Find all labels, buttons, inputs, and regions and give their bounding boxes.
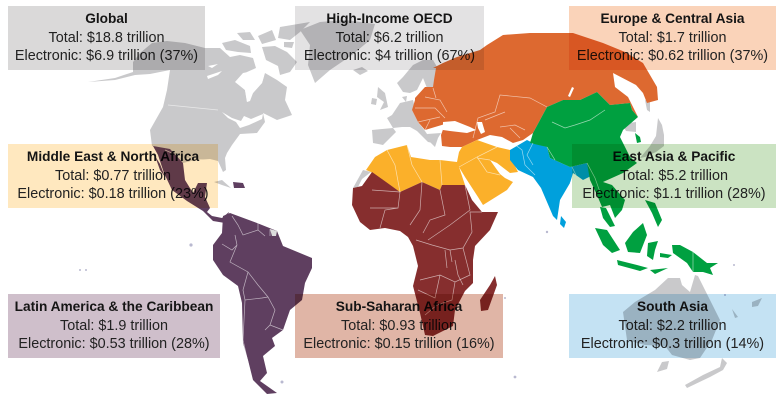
panel: High-Income OECD: Electronic: $4 trillion (67%): [304, 48, 475, 64]
panel: South Asia: [569, 294, 776, 358]
map: small islands: [79, 231, 735, 384]
map: lakes and bays of North America: [207, 64, 264, 128]
panel: East Asia and Pacific: Electronic: $1.1 trillion (28%): [582, 186, 766, 202]
panel: South Asia: Total: $2.2 trillion: [618, 318, 726, 334]
panel: Sub-Saharan Africa: Electronic: $0.15 trillion (16%): [303, 336, 495, 352]
map: high-income OECD and unclassified regions: [88, 20, 762, 388]
panel: Europe and Central Asia: [569, 6, 776, 70]
map: Sub-Saharan Africa: [352, 172, 498, 336]
panel: South Asia: South Asia: [637, 299, 708, 314]
map: Madagascar: [480, 276, 497, 311]
panel: Europe and Central Asia: Europe & Central Asia: [600, 11, 744, 26]
panel: Global: Electronic: $6.9 trillion (37%): [15, 48, 198, 64]
panel: East Asia and Pacific: [572, 144, 776, 208]
panel: Sub-Saharan Africa: Total: $0.93 trillion: [341, 318, 457, 334]
panel: East Asia and Pacific: East Asia & Pacific: [613, 149, 735, 164]
map: Sri Lanka: [560, 216, 566, 228]
panel: South Asia: Electronic: $0.3 trillion (14%): [581, 336, 764, 352]
map: Middle East and North Africa: [366, 140, 518, 205]
panel: High-Income OECD: Total: $6.2 trillion: [336, 30, 444, 46]
panel: Global: Global: [85, 11, 128, 26]
map: borders: [165, 88, 693, 380]
panel: High-Income OECD: High-Income OECD: [326, 11, 453, 26]
map: South Asia: [510, 140, 593, 220]
panel: Europe and Central Asia: Electronic: $0.62 trillion (37%): [577, 48, 768, 64]
panel: Global: Total: $18.8 trillion: [48, 30, 164, 46]
panel: Latin America and the Caribbean: Total: $1.9 trillion: [60, 318, 168, 334]
map: Latin America and the Caribbean: [153, 146, 312, 394]
map: French Guiana: [270, 229, 277, 236]
panel: Middle East and North Africa: Total: $0.77 trillion: [55, 168, 171, 184]
panel: Global: [8, 6, 205, 70]
panel: Sub-Saharan Africa: [295, 294, 503, 358]
map: East Asia and Pacific: [530, 92, 718, 275]
map: Black Sea, Caspian, Baikal: [443, 87, 574, 134]
panel: Middle East and North Africa: Middle East & North Africa: [27, 149, 199, 164]
panel: Europe and Central Asia: Total: $1.7 trillion: [618, 30, 726, 46]
panel: Middle East and North Africa: Electronic: $0.18 trillion (23%): [17, 186, 209, 202]
panel: Latin America and the Caribbean: Electronic: $0.53 trillion (28%): [18, 336, 210, 352]
map: Europe and Central Asia: [412, 33, 658, 147]
panel: East Asia and Pacific: Total: $5.2 trillion: [620, 168, 728, 184]
panel: Sub-Saharan Africa: Sub-Saharan Africa: [336, 299, 462, 314]
panel: Latin America and the Caribbean: Latin America & the Caribbean: [15, 299, 213, 314]
panel: High-Income OECD: [295, 6, 484, 70]
panel: Latin America and the Caribbean: [8, 294, 220, 358]
panel: Middle East and North Africa: [8, 144, 218, 208]
